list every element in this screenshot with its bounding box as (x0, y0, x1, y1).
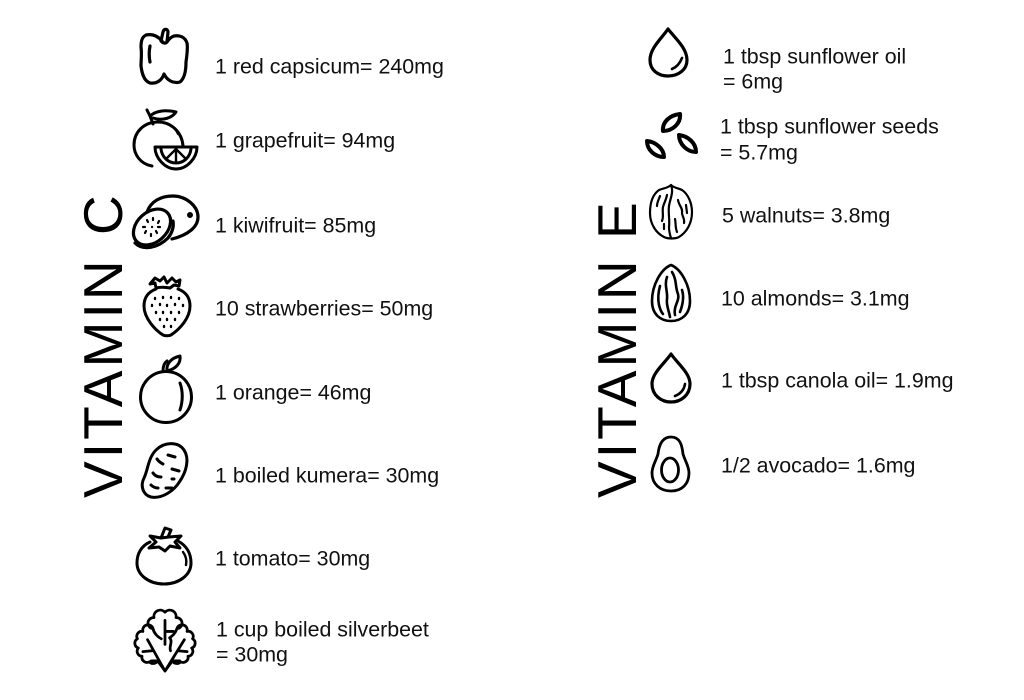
label: silverbeet: = 30mg (216, 642, 288, 666)
label: silverbeet (216, 618, 429, 666)
icon: grapefruit (134, 110, 197, 169)
label: sunflower seeds: = 5.7mg (720, 140, 798, 164)
label: orange: 1 orange= 46mg (215, 380, 371, 404)
icon: tomato (137, 528, 191, 584)
icon: kiwifruit (126, 196, 198, 252)
icon: almond (652, 265, 690, 321)
label: almonds: 10 almonds= 3.1mg (721, 286, 909, 310)
icon: orange (140, 356, 192, 422)
label: boiled kumera: 1 boiled kumera= 30mg (215, 464, 439, 488)
title: Vitamin C: VITAMIN C (72, 192, 134, 498)
label: kiwifruit: 1 kiwifruit= 85mg (215, 214, 376, 238)
label: tomato: 1 tomato= 30mg (215, 546, 370, 570)
label: sunflower seeds (720, 114, 939, 164)
icon: walnut (650, 185, 692, 238)
icon: sunflower seeds (647, 114, 696, 157)
label: strawberries: 10 strawberries= 50mg (215, 296, 433, 320)
icon: capsicum (141, 29, 187, 83)
label: sunflower oil: 1 tbsp sunflower oil (723, 44, 906, 68)
label: sunflower oil (723, 44, 906, 94)
icon: kumera (142, 444, 187, 497)
label: sunflower oil: = 6mg (723, 70, 783, 94)
label: sunflower seeds: 1 tbsp sunflower seeds (720, 114, 939, 138)
label: canola oil: 1 tbsp canola oil= 1.9mg (721, 368, 953, 392)
label: walnuts: 5 walnuts= 3.8mg (722, 204, 890, 228)
label: silverbeet: 1 cup boiled silverbeet (216, 618, 429, 642)
icon: sunflower oil drop (650, 29, 687, 76)
icon: avocado (652, 437, 689, 491)
title: Vitamin E: VITAMIN E (586, 199, 648, 498)
icon: strawberry (144, 277, 190, 336)
icon: canola oil drop (652, 354, 690, 402)
label: grapefruit: 1 grapefruit= 94mg (215, 128, 395, 152)
label: avocado: 1/2 avocado= 1.6mg (721, 454, 915, 478)
label: red capsicum: 1 red capsicum= 240mg (215, 54, 444, 78)
icon: silverbeet (135, 610, 195, 671)
